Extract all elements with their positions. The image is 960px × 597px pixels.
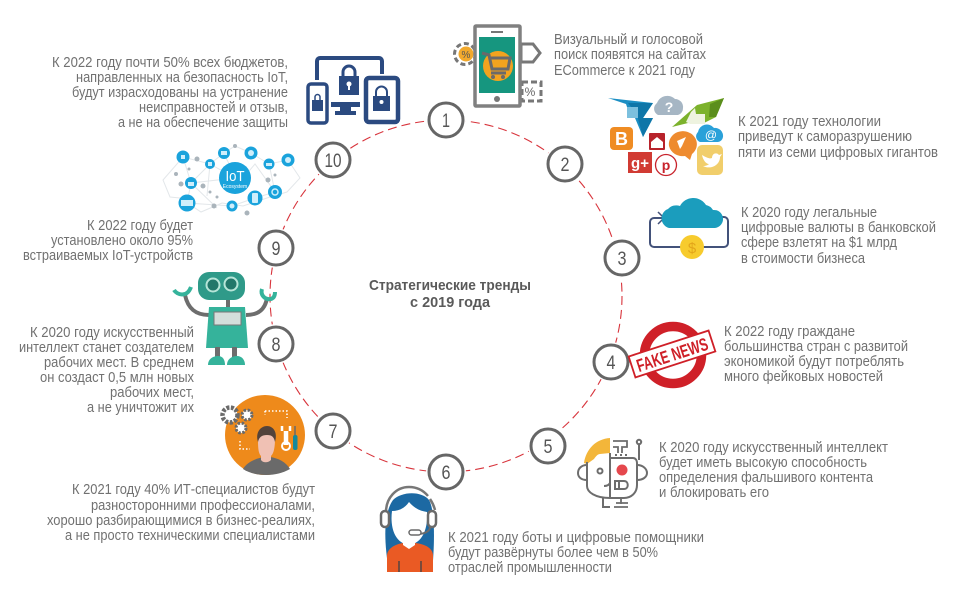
icon: social media cluster: g+ [631, 155, 649, 172]
icon: social media cluster: @ [705, 128, 717, 142]
icon: cloud currency [650, 198, 728, 259]
tablet [366, 78, 398, 122]
pinterest [656, 154, 676, 176]
face [392, 502, 427, 545]
microphone [418, 527, 430, 534]
number marker 4: 4 [606, 353, 616, 374]
text: trend 1: поиск появятся на сайтах [554, 46, 706, 63]
icon: social media cluster: B [615, 129, 628, 149]
number marker 7: 7 [328, 422, 338, 443]
cart disc [483, 51, 513, 81]
number marker 5: 5 [544, 437, 552, 458]
legs [215, 347, 220, 358]
dotted traces [240, 411, 287, 449]
text: trend 1: Визуальный и голосовой [554, 31, 703, 48]
text: trend 2 [738, 113, 938, 161]
central hub [219, 162, 251, 194]
red eye [616, 464, 628, 476]
text: trend 8: интеллект станет создателем [19, 339, 194, 356]
monitor stand [331, 102, 360, 115]
text: trend 6: будут развёрнуты более чем в 50% [448, 544, 658, 561]
neck and face [258, 432, 275, 462]
number marker 7 [313, 411, 353, 451]
bottom plates [614, 498, 628, 507]
headband [386, 487, 428, 512]
text: trend 5: определения фальшивого контента [659, 469, 874, 486]
text: trend 3: К 2020 году легальные [741, 204, 877, 221]
icon: IoT ecosystem: Ecosystem [223, 184, 247, 190]
number marker 5 [528, 426, 568, 466]
text: trend 7: разносторонними профессионалами, [91, 497, 315, 514]
mouth [615, 481, 628, 489]
icon: IoT ecosystem [163, 144, 300, 216]
text: trend 2: К 2021 году технологии [738, 113, 881, 130]
text: trend 4: экономикой будут потреблять [724, 353, 904, 370]
icon: IT specialist [222, 395, 305, 475]
text: trend 9 [23, 217, 193, 264]
text: trend 1: ECommerce к 2021 году [554, 62, 695, 79]
hair [584, 438, 610, 464]
number marker 9: 9 [272, 239, 280, 260]
feet [208, 356, 225, 365]
left ear [578, 465, 587, 480]
number marker 6 [426, 452, 466, 492]
number marker 10: 10 [324, 151, 342, 172]
text: trend 2: приведут к саморазрушению [738, 128, 912, 145]
text: trend 7: К 2021 году 40% ИТ-специалистов будут [72, 481, 315, 498]
number marker 3: 3 [618, 249, 626, 270]
icon: ecommerce phone [454, 26, 541, 106]
blue speech shape [608, 98, 653, 137]
number marker 2 [545, 144, 585, 184]
title: Стратегические тренды [369, 277, 531, 294]
text: trend 7 [47, 481, 315, 544]
icon: fake news stamp [629, 326, 715, 384]
chest screen [214, 312, 241, 325]
dollar coin [680, 235, 704, 259]
phone [308, 84, 327, 123]
text: trend 7: хорошо разбирающимися в бизнес-реалиях, [47, 512, 315, 529]
price tag right [521, 44, 540, 62]
hand claws [174, 287, 191, 294]
number marker 4 [591, 342, 631, 382]
discount badge left: % [462, 50, 471, 61]
human face half [587, 453, 610, 498]
number marker 1 [426, 100, 466, 140]
text: trend 3: в стоимости бизнеса [741, 250, 866, 267]
icon: secured devices [308, 58, 398, 123]
green thumbs up [672, 98, 724, 127]
ear cups [381, 511, 389, 527]
text: trend 3: цифровые валюты в банковской [741, 219, 936, 236]
icon: cloud currency: $ [688, 240, 697, 257]
right ear [637, 465, 647, 480]
home icon [649, 133, 665, 150]
title: с 2019 года [410, 294, 491, 311]
arms [185, 295, 267, 315]
at cloud [696, 124, 723, 142]
text: trend 8: рабочих мест, [110, 384, 194, 401]
text: trend 9: установлено около 95% [51, 232, 193, 249]
network lines [163, 146, 300, 212]
neck [226, 300, 230, 308]
icon: social media cluster: p [662, 157, 670, 173]
yellow twitter tile [697, 145, 723, 175]
text: trend 5: и блокировать его [659, 484, 769, 501]
icon: IoT ecosystem: IoT [226, 168, 244, 185]
text: trend 10 [52, 54, 288, 131]
icon: half human half robot head [578, 438, 647, 507]
phone body [475, 26, 520, 106]
gray nodes [174, 144, 276, 216]
circuit top [613, 441, 627, 453]
blogger [610, 127, 633, 150]
dashed ring [270, 120, 622, 472]
text: trend 6 [448, 529, 704, 576]
question cloud [654, 96, 683, 115]
text: trend 9: К 2022 году будет [87, 217, 193, 234]
number marker 6: 6 [442, 463, 450, 484]
head [198, 272, 245, 300]
text: trend 8: а не уничтожит их [87, 399, 194, 416]
smile [604, 483, 610, 486]
title [369, 277, 531, 311]
icon: social media cluster [608, 96, 724, 176]
red ring [644, 326, 702, 384]
blue nodes [176, 146, 294, 212]
text: trend 10: а не на обеспечение защиты [118, 114, 288, 131]
loop arrow [650, 217, 728, 247]
text: trend 3: сфере взлетят на $1 млрд [741, 234, 897, 251]
number marker 8: 8 [272, 335, 280, 356]
shoulders [243, 457, 290, 475]
text: trend 6: К 2021 году боты и цифровые помощники [448, 529, 704, 546]
icon: social media cluster: ? [665, 99, 673, 115]
icon: support operator [381, 487, 436, 572]
screwdriver [294, 426, 296, 435]
text: trend 9: встраиваемых IoT-устройств [23, 247, 193, 264]
text: trend 8 [19, 324, 194, 416]
text: trend 8: он создаст 0,5 млн новых [40, 369, 194, 386]
node glyphs [181, 150, 291, 208]
text: trend 5: К 2020 году искусственный интеллект [659, 439, 888, 456]
collar [403, 541, 415, 549]
google plus [628, 152, 652, 173]
text: trend 4 [724, 323, 908, 385]
text: trend 8: рабочих мест. В среднем [44, 354, 194, 371]
number marker 10 [313, 140, 353, 180]
text: trend 3 [741, 204, 936, 267]
cart [482, 53, 510, 73]
number marker 8 [256, 324, 296, 364]
text: trend 10: неисправностей и отзыв, [139, 99, 288, 116]
wrench [284, 431, 288, 445]
blue hair [385, 493, 434, 572]
text: trend 2: пяти из семи цифровых гигантов [738, 144, 938, 161]
number marker 2: 2 [560, 155, 570, 176]
hair [257, 426, 276, 442]
number marker 9 [256, 228, 296, 268]
text: trend 4: большинства стран с развитой [724, 338, 908, 355]
dots [615, 454, 628, 456]
text: trend 7: а не просто техническими специалистами [65, 527, 315, 544]
centre lock [339, 66, 359, 95]
monitor frame [317, 58, 382, 80]
eye [598, 468, 602, 474]
robot face half [611, 458, 637, 498]
text: trend 8: К 2020 году искусственный [30, 324, 194, 341]
text: trend 5: будет иметь высокую способность [659, 454, 867, 471]
eyes [206, 278, 220, 292]
orange torso [387, 543, 433, 572]
ring node centre [272, 189, 278, 195]
number marker 3 [602, 238, 642, 278]
icon: robot [174, 272, 275, 365]
dashed coupon: % [525, 85, 536, 99]
text: trend 10: направленных на безопасность IoT, [76, 69, 288, 86]
text: trend 1 [554, 31, 706, 79]
text: trend 10: К 2022 году почти 50% всех бюджетов, [52, 54, 288, 71]
text: trend 10: будут израсходованы на устранение [72, 84, 288, 101]
text: trend 5 [659, 439, 888, 501]
gears [222, 408, 238, 422]
text: trend 4: много фейковых новостей [724, 368, 883, 385]
number marker 1: 1 [442, 111, 450, 132]
stamp label: FAKE NEWS [634, 334, 711, 376]
body [206, 307, 248, 348]
orange bubble [669, 131, 697, 160]
screen [479, 37, 515, 93]
text: trend 4: К 2022 году граждане [724, 323, 855, 340]
antenna [637, 440, 641, 444]
text: trend 6: отраслей промышленности [448, 559, 612, 576]
cloud [662, 198, 723, 228]
neck [603, 498, 610, 507]
orange disc [225, 395, 305, 475]
